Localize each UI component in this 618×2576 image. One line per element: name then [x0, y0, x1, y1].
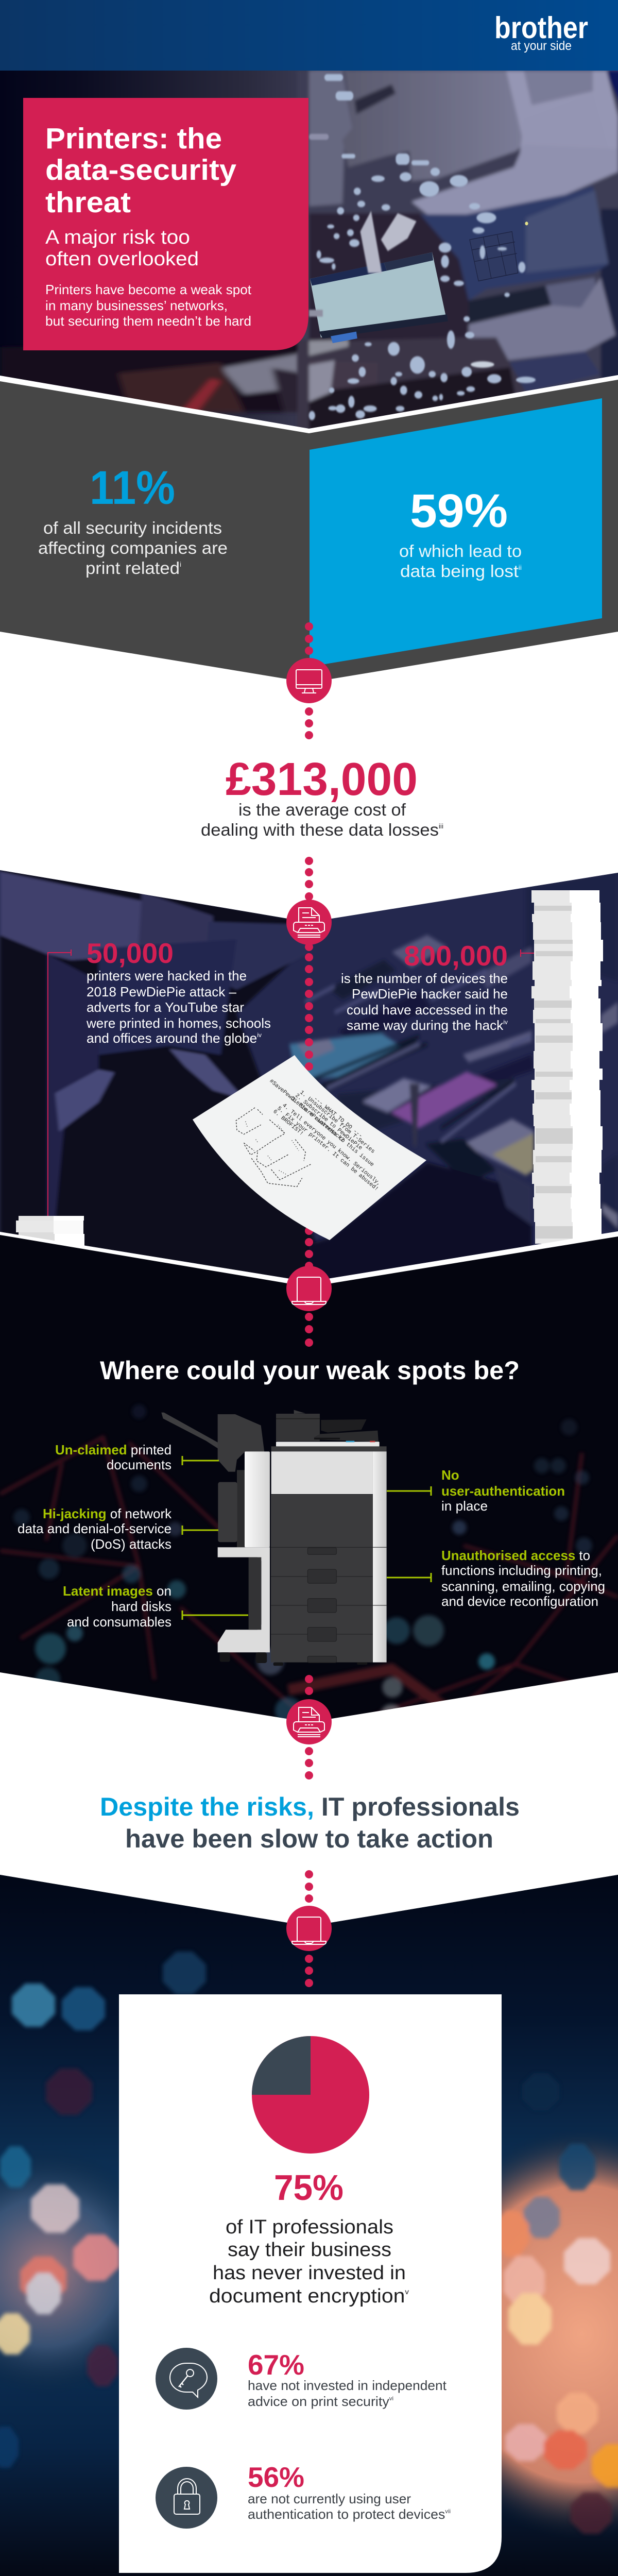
panel: PewDiePie attack photo	[0, 866, 618, 1288]
printout text: 5. Fix your printer. It can be abused!	[276, 1106, 380, 1193]
stat: 59%	[310, 398, 602, 667]
intro text: Printers have become a weak spot	[45, 282, 252, 297]
stat: 50,000: were printed in homes, schools	[86, 1015, 271, 1031]
stat: 50,000: 50,000	[87, 937, 174, 969]
stat: 50,000	[86, 937, 271, 1046]
subtitle: often overlooked	[45, 248, 199, 270]
icon: key in speech bubble	[156, 2348, 217, 2410]
illustration: hacked printout	[193, 1055, 426, 1240]
callout: unauthorised access	[387, 1548, 605, 1609]
stat: 11%: 11%	[90, 462, 175, 514]
stat: 56%: are not currently using user	[248, 2491, 411, 2506]
paper stack: tall	[531, 890, 603, 1245]
stat: 50,000: 2018 PewDiePie attack –	[87, 984, 237, 999]
stat: 67%: have not invested in independent	[248, 2378, 447, 2393]
stat: 59%: data being lost	[400, 562, 511, 581]
stat: 50,000: and offices around the globe	[87, 1030, 255, 1046]
paper stack: small	[16, 1216, 84, 1248]
text: 75% description: say their business	[228, 2239, 391, 2261]
printout text: --- WHAT TO DO ---	[312, 1096, 364, 1140]
paper fragments	[309, 74, 536, 420]
intro text	[45, 282, 252, 329]
callouts left	[18, 1442, 248, 1630]
callout: hi-jacking: data and denial-of-service	[18, 1521, 171, 1536]
icon: printer	[286, 900, 332, 945]
logo: brother at your side: brother	[494, 11, 588, 45]
callout: no user-authentication: in place	[441, 1498, 488, 1514]
stat: 59%: of which lead to	[399, 541, 522, 561]
callouts right	[387, 1467, 605, 1609]
stat: 50,000: adverts for a YouTube star	[87, 999, 244, 1015]
stat: 56%: 56%	[248, 2461, 304, 2493]
timeline: connector dots and icons	[286, 622, 332, 1987]
printout text	[268, 1078, 382, 1193]
printout text: 6. BROFIST!	[271, 1109, 304, 1137]
stat: 11%: of all security incidents	[43, 518, 222, 537]
stat: 59%: 59%	[410, 485, 508, 537]
printout text: 3. Share awarness to this issue	[289, 1096, 375, 1168]
text: 75% description: document encryption	[209, 2285, 391, 2307]
intro text: but securing them needn’t be hard	[45, 313, 251, 329]
panel: bokeh background	[0, 1870, 618, 2576]
heading: slow to take action: have been slow to take action	[125, 1824, 493, 1853]
text: 75% description: of IT professionals	[226, 2216, 393, 2238]
icon: desktop monitor	[286, 658, 332, 703]
stat: 11%: print related	[85, 558, 175, 578]
printer screen	[310, 252, 448, 343]
callout: no user-authentication: user-authentication	[441, 1483, 565, 1499]
printout ascii fist	[236, 1108, 311, 1187]
printout text: #SavePewDiePie #PrinterHack2	[268, 1078, 346, 1144]
stat: 67%: vi	[389, 2396, 393, 2402]
text: 75% description	[209, 2216, 409, 2307]
pie chart: 75%	[252, 2036, 369, 2154]
title: threat	[45, 186, 131, 219]
stat: 56%: authentication to protect devices	[248, 2506, 440, 2522]
stat: 11%	[38, 462, 228, 578]
title	[45, 122, 236, 219]
stat: £313,000: £313,000	[226, 754, 418, 805]
stat: 800,000: same way during the hack	[347, 1018, 502, 1033]
printout text: 1. Unsubscribe from T-Series	[298, 1090, 376, 1155]
callout: un-claimed documents	[55, 1442, 219, 1472]
stat: 800,000: could have accessed in the	[347, 1002, 508, 1018]
stat: 800,000: iv	[503, 1019, 508, 1026]
stat: £313,000: dealing with these data losses	[201, 820, 427, 839]
stat: 67%: 67%	[248, 2349, 304, 2381]
stat: 11%: affecting companies are	[38, 538, 228, 557]
printer keypad	[470, 231, 518, 281]
icon: padlock	[156, 2467, 217, 2529]
stat: 56%	[248, 2461, 451, 2522]
callout: un-claimed documents: documents	[107, 1457, 171, 1472]
icon: printer	[286, 1699, 332, 1744]
subtitle	[45, 227, 199, 270]
intro text: in many businesses’ networks,	[45, 298, 228, 313]
callout: un-claimed documents: Un-claimed printed	[55, 1442, 171, 1458]
printout text: 4. Tell everyone you know. Seriously,	[281, 1103, 382, 1187]
icon: laptop	[286, 1266, 332, 1311]
stat: 11%: i	[180, 561, 181, 568]
panel: investment stats card	[119, 1994, 502, 2573]
stat: 75%: 75%	[274, 2167, 344, 2208]
panel: title card	[23, 98, 308, 350]
panel: print-related incidents	[0, 375, 618, 683]
stat: 67%: advice on print security	[248, 2394, 385, 2409]
callout: latent images: Latent images on	[63, 1583, 171, 1599]
callout: latent images: hard disks	[111, 1599, 171, 1614]
callout: hi-jacking: (DoS) attacks	[91, 1536, 171, 1552]
callout: unauthorised access: functions including printing,	[441, 1563, 602, 1578]
stat: 800,000: is the number of devices the	[341, 971, 508, 986]
callout: hi-jacking	[18, 1506, 218, 1552]
heading: weak spots: Where could your weak spots be?	[100, 1356, 520, 1385]
callout: latent images	[63, 1583, 248, 1630]
connector: 800,000 to tall stack	[521, 950, 537, 957]
stat: 59%: ii	[519, 564, 522, 571]
stat: £313,000: is the average cost of	[238, 800, 406, 819]
heading: slow to take action: Despite the risks, IT professionals	[100, 1792, 520, 1821]
logo: brother at your side: at your side	[511, 39, 572, 53]
header bar	[0, 0, 618, 71]
illustration: multifunction printer	[161, 1410, 387, 1666]
stat: 800,000: PewDiePie hacker said he	[352, 986, 508, 1002]
stat: £313,000	[201, 754, 443, 839]
stat: £313,000: iii	[439, 822, 443, 830]
callout: unauthorised access: and device reconfiguration	[441, 1594, 598, 1609]
callout: no user-authentication: No	[441, 1467, 459, 1483]
title: data-security	[45, 154, 236, 187]
hero photo: printer dissolving	[0, 71, 618, 436]
stat: 50,000: iv	[257, 1031, 262, 1039]
stat: 800,000	[341, 940, 508, 1033]
callout: unauthorised access: scanning, emailing, copying	[441, 1579, 605, 1594]
dots: timeline	[305, 953, 313, 1270]
stat: 800,000: 800,000	[404, 940, 508, 972]
callout: latent images: and consumables	[67, 1614, 171, 1630]
stat: 56%: vii	[445, 2509, 451, 2515]
panel: weak spots	[0, 1231, 618, 1727]
callout: no user-authentication	[387, 1467, 565, 1514]
icon: laptop	[286, 1906, 332, 1951]
title: Printers: the	[45, 122, 222, 155]
callout: unauthorised access: Unauthorised access to	[441, 1548, 590, 1563]
stat: 50,000: printers were hacked in the	[87, 968, 247, 984]
stat: 67%	[248, 2349, 447, 2409]
heading: slow to take action	[100, 1792, 520, 1853]
subtitle: A major risk too	[45, 227, 190, 248]
text: 75% description: has never invested in	[213, 2262, 406, 2284]
printout text: 2. Subscribe to PewDiePie	[294, 1093, 363, 1151]
text: 75% description: v	[405, 2287, 409, 2296]
callout: hi-jacking: Hi-jacking of network	[43, 1506, 172, 1521]
connector: 50,000 to small stack	[48, 950, 71, 1217]
